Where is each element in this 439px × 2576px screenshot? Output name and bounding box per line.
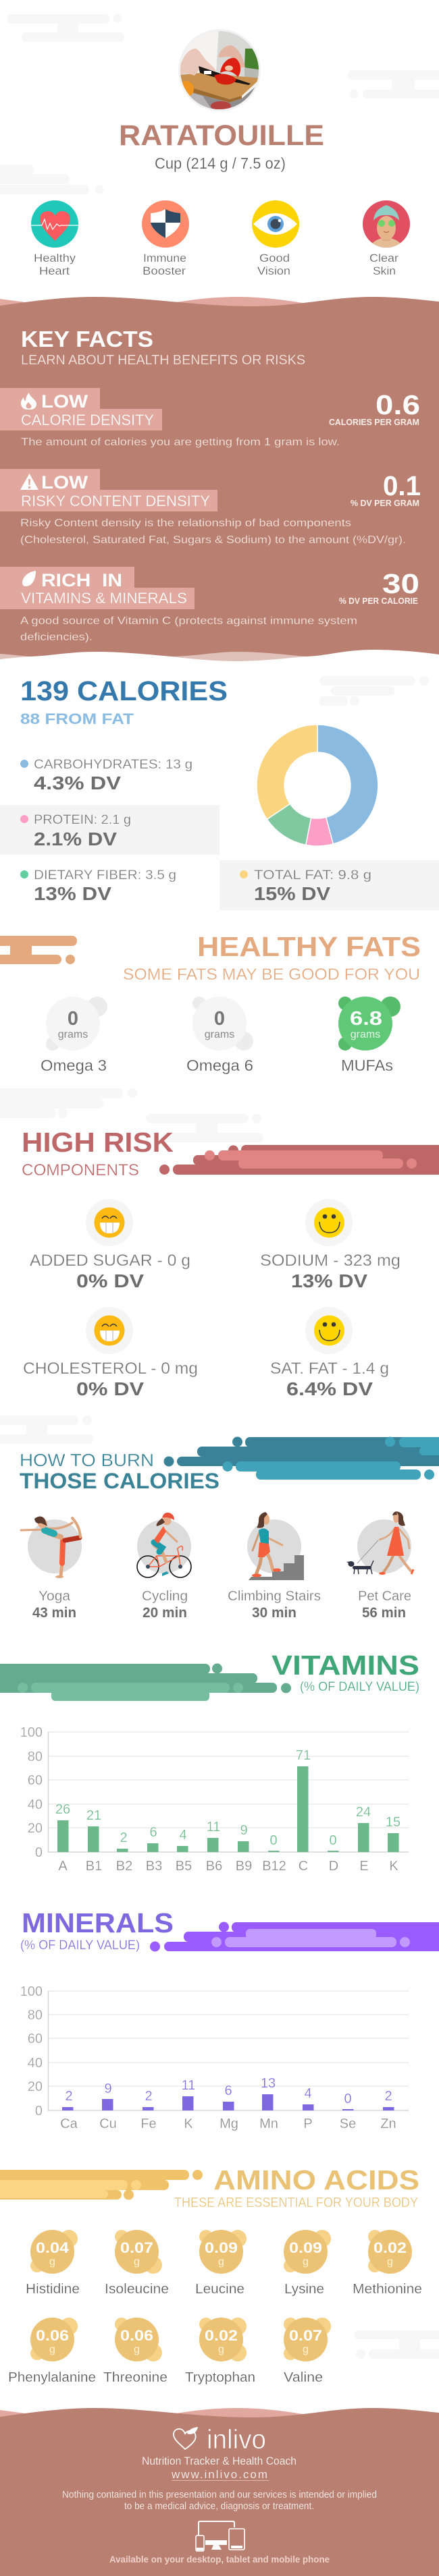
heading: amino acids: AMINO ACIDS <box>213 2164 419 2195</box>
value: 0.1: 0.1 <box>383 470 421 501</box>
bar chart: minerals: 0 <box>35 2104 43 2119</box>
isoleucine: 0.07 <box>120 2239 153 2256</box>
omega 6 <box>186 997 253 1074</box>
heading: those calories: THOSE CALORIES <box>20 1469 220 1493</box>
bar chart: minerals: 4 <box>304 2086 312 2101</box>
added sugar <box>30 1199 190 1291</box>
added sugar: ADDED SUGAR - 0 g <box>30 1252 190 1270</box>
bar chart: vitamins: 26 <box>55 1802 70 1817</box>
label: immune booster <box>143 252 186 277</box>
bar chart: vitamins: 0 <box>269 1833 278 1848</box>
serving size: Cup (214 g / 7.5 oz) <box>155 155 286 172</box>
bar chart: minerals: K <box>184 2117 193 2131</box>
panel: calories <box>0 675 439 910</box>
saturated fat: SAT. FAT - 1.4 g <box>270 1360 389 1378</box>
bar chart: vitamins: 80 <box>28 1749 43 1764</box>
omega 3 <box>41 997 107 1074</box>
legend: protein: PROTEIN: 2.1 g <box>34 813 131 827</box>
methionine <box>353 2230 422 2297</box>
histidine: 0.04 <box>36 2239 70 2256</box>
logo: inlivo: inlivo <box>207 2425 266 2455</box>
bar chart: minerals: 100 <box>20 1984 43 1999</box>
activity: cycling <box>137 1513 191 1577</box>
subheading: components: COMPONENTS <box>22 1161 139 1179</box>
label: good vision: Good <box>259 252 290 264</box>
label: clear skin: Skin <box>373 264 396 277</box>
label: pet care <box>358 1589 411 1621</box>
label: yoga: Yoga <box>38 1589 71 1604</box>
donut chart <box>257 725 378 846</box>
omega 3: grams <box>58 1029 88 1040</box>
label: clear skin: Clear <box>369 252 398 264</box>
panel: how to burn those calories <box>0 1416 439 1621</box>
bar chart: minerals: 2 <box>384 2089 392 2104</box>
label: good vision <box>257 252 290 277</box>
bar chart: vitamins: B6 <box>206 1859 222 1874</box>
legend: protein: 2.1% DV <box>34 829 118 849</box>
cholesterol: CHOLESTEROL - 0 mg <box>23 1360 198 1378</box>
omega 6: 0 <box>214 1008 225 1030</box>
legend: protein <box>0 805 220 855</box>
icon: leaf <box>22 571 36 586</box>
legend: total fat: TOTAL FAT: 9.8 g <box>254 868 371 883</box>
bar chart: vitamins: A <box>58 1859 68 1874</box>
icon: good vision <box>252 200 299 248</box>
bar chart: vitamins: 100 <box>20 1725 43 1740</box>
legend: dietary fiber: 13% DV <box>34 883 112 904</box>
title: RATATOUILLE <box>119 119 324 152</box>
label: pet care: Pet Care <box>358 1589 411 1604</box>
cholesterol <box>23 1307 198 1399</box>
bar chart: minerals: Fe <box>140 2117 157 2131</box>
bar chart: vitamins: 24 <box>356 1805 371 1820</box>
legend: total fat: 15% DV <box>254 883 331 904</box>
bar chart: vitamins: 60 <box>28 1773 43 1788</box>
label: healthy heart: Healthy <box>34 252 76 264</box>
heading: key facts: KEY FACTS <box>21 327 153 352</box>
label: yoga: 43 min <box>32 1605 76 1621</box>
icon: warning <box>20 474 38 490</box>
activity: yoga <box>21 1517 82 1578</box>
bar chart: vitamins: E <box>359 1859 369 1874</box>
bar chart: minerals: Mg <box>220 2117 238 2131</box>
disclaimer: Nothing contained in this presentation and our services is intended or implied <box>62 2490 377 2500</box>
label: low: LOW <box>41 391 88 412</box>
disclaimer <box>62 2490 377 2512</box>
panel: high risk components <box>0 1088 439 1399</box>
legend: carbohydrates: CARBOHYDRATES: 13 g <box>34 758 192 772</box>
mufas: grams <box>351 1029 380 1040</box>
threonine: g <box>134 2344 140 2355</box>
logo: inlivo <box>174 2425 266 2455</box>
panel: key facts <box>0 297 439 661</box>
bar chart: minerals: Zn <box>380 2117 396 2131</box>
phenylalanine: 0.06 <box>36 2327 69 2344</box>
isoleucine: Isoleucine <box>105 2282 169 2297</box>
omega 6: Omega 6 <box>186 1057 253 1074</box>
bar chart: minerals: Se <box>340 2117 356 2131</box>
icon: healthy heart <box>31 200 78 248</box>
mufas <box>338 997 401 1074</box>
disclaimer: to be a medical advice, diagnosis or treatment. <box>124 2501 314 2512</box>
tryptophan: g <box>218 2344 224 2355</box>
methionine: 0.02 <box>373 2239 407 2256</box>
label: vitamins and minerals: VITAMINS & MINERALS <box>21 590 187 607</box>
legend: carbohydrates: 4.3% DV <box>34 773 122 793</box>
tryptophan: Tryptophan <box>185 2370 255 2385</box>
banner: teal cloud <box>163 1437 439 1480</box>
label: low: LOW <box>41 472 88 493</box>
bar chart: vitamins: B5 <box>176 1859 192 1874</box>
valine: g <box>303 2344 309 2355</box>
cholesterol: 0% DV <box>76 1378 145 1399</box>
bar chart: minerals: 6 <box>224 2083 232 2098</box>
sodium <box>260 1199 401 1291</box>
label: rich in: RICH IN <box>41 570 122 590</box>
benefit icons row <box>31 200 410 277</box>
subheading: THESE ARE ESSENTIAL FOR YOUR BODY <box>174 2195 418 2210</box>
label: pet care: 56 min <box>362 1605 406 1621</box>
isoleucine: g <box>134 2256 140 2268</box>
subheading: daily value: (% OF DAILY VALUE) <box>300 1679 419 1694</box>
label: healthy heart: Heart <box>39 264 70 277</box>
icon: smile <box>314 1208 344 1237</box>
bar chart: vitamins: C <box>299 1859 308 1874</box>
bar chart: vitamins: 71 <box>296 1748 311 1763</box>
unit: calories per gram: CALORIES PER GRAM <box>329 418 419 427</box>
omega 3: 0 <box>68 1008 78 1030</box>
website: www.inlivo.com <box>171 2468 267 2481</box>
methionine: g <box>387 2256 393 2268</box>
icon: immune booster <box>142 200 189 248</box>
description: A good source of Vitamin C (protects against immune system <box>20 615 357 627</box>
phenylalanine: Phenylalanine <box>8 2370 96 2385</box>
bar chart: minerals: 9 <box>104 2081 112 2096</box>
panel: healthy fats <box>0 931 421 1074</box>
heading: high risk: HIGH RISK <box>22 1127 174 1158</box>
fact: calorie density <box>0 388 420 448</box>
description: (Cholesterol, Saturated Fat, Sugars & Sodium) to the amount (%DV/gr). <box>20 534 406 546</box>
leucine <box>195 2230 247 2297</box>
banner: red cloud <box>159 1145 439 1175</box>
histidine <box>26 2230 80 2297</box>
heading: vitamins: VITAMINS <box>272 1650 419 1681</box>
lysine <box>284 2230 331 2297</box>
bar chart: vitamins: B1 <box>86 1859 102 1874</box>
bar chart: vitamins: 0 <box>329 1833 337 1848</box>
legend: dietary fiber: DIETARY FIBER: 3.5 g <box>34 868 176 883</box>
valine <box>284 2318 331 2385</box>
histidine: Histidine <box>26 2282 80 2297</box>
bar chart: vitamins: 15 <box>386 1815 401 1830</box>
heading: how to burn: HOW TO BURN <box>20 1450 154 1470</box>
banner: green cloud <box>0 1664 291 1701</box>
sodium: SODIUM - 323 mg <box>260 1252 401 1270</box>
availability note: Available on your desktop, tablet and mobile phone <box>109 2554 330 2565</box>
icon: flame <box>21 393 36 410</box>
bar chart: vitamins: B9 <box>236 1859 252 1874</box>
methionine: Methionine <box>353 2282 422 2297</box>
label: cycling: Cycling <box>142 1589 188 1604</box>
subheading: from fat: 88 FROM FAT <box>20 710 134 727</box>
lysine: g <box>303 2256 309 2268</box>
legend: total fat <box>220 860 439 910</box>
tagline: Nutrition Tracker & Health Coach <box>142 2455 296 2467</box>
phenylalanine: g <box>49 2344 55 2355</box>
icon: grin <box>95 1208 124 1237</box>
bar chart: minerals: 11 <box>182 2078 195 2093</box>
mufas: 6.8 <box>350 1008 382 1030</box>
bar chart: vitamins: K <box>389 1859 398 1874</box>
bar chart: minerals: P <box>303 2117 313 2131</box>
heading: healthy fats: HEALTHY FATS <box>197 931 421 962</box>
bar chart: minerals <box>20 1984 409 2131</box>
omega 3: Omega 3 <box>41 1057 107 1074</box>
label: risky content density: RISKY CONTENT DENSITY <box>21 493 210 509</box>
activity: pet care <box>346 1511 413 1575</box>
fact: rich in vitamins and minerals <box>0 567 419 643</box>
threonine <box>103 2318 167 2385</box>
panel: minerals <box>20 1907 439 2131</box>
bar chart: vitamins: 20 <box>28 1821 43 1836</box>
threonine: Threonine <box>103 2370 167 2385</box>
description: Risky Content density is the relationship of bad components <box>20 517 351 529</box>
label: climbing stairs <box>228 1589 321 1621</box>
leucine: 0.09 <box>205 2239 238 2256</box>
bar chart: minerals: 40 <box>28 2056 43 2071</box>
bar chart: vitamins: 0 <box>35 1845 43 1860</box>
icon: smile <box>314 1316 344 1345</box>
bar chart: vitamins: B2 <box>116 1859 132 1874</box>
mufas: MUFAs <box>341 1057 393 1074</box>
threonine: 0.06 <box>120 2327 153 2344</box>
lysine: 0.09 <box>289 2239 322 2256</box>
fact: risky content density <box>0 469 421 546</box>
bar chart: minerals: 20 <box>28 2079 43 2094</box>
saturated fat <box>270 1307 389 1399</box>
icon: devices <box>196 2521 244 2551</box>
label: yoga <box>32 1589 76 1621</box>
legend: dietary fiber <box>20 868 176 904</box>
added sugar: 0% DV <box>76 1270 145 1291</box>
bar chart: vitamins: 11 <box>207 1820 220 1835</box>
description: The amount of calories you are getting from 1 gram is low. <box>21 437 340 448</box>
value: 30: 30 <box>382 568 419 599</box>
bar chart: vitamins: 4 <box>179 1828 187 1843</box>
leucine: g <box>218 2256 224 2268</box>
tryptophan <box>185 2318 255 2385</box>
bar chart: vitamins: 40 <box>28 1797 43 1812</box>
panel: amino acids <box>0 2164 439 2385</box>
subheading: SOME FATS MAY BE GOOD FOR YOU <box>123 965 420 984</box>
description: deficiencies). <box>20 632 93 643</box>
bar chart: vitamins: 6 <box>149 1825 157 1840</box>
label: immune booster: Booster <box>143 264 186 277</box>
heading: 139 calories: 139 CALORIES <box>20 675 228 706</box>
banner: yellow cloud <box>0 2170 203 2200</box>
panel: footer <box>0 2408 439 2576</box>
bar chart: vitamins: 21 <box>86 1808 101 1823</box>
description <box>20 615 357 643</box>
panel: vitamins <box>0 1650 419 1874</box>
bar chart: vitamins: D <box>329 1859 338 1874</box>
bar chart: minerals: 80 <box>28 2008 43 2023</box>
lysine: Lysine <box>284 2282 324 2297</box>
sodium: 13% DV <box>291 1270 368 1291</box>
label: cycling: 20 min <box>143 1605 187 1621</box>
bar chart: minerals: 2 <box>145 2089 153 2104</box>
banner: orange cloud <box>0 936 77 964</box>
bar chart: minerals: Cu <box>99 2117 117 2131</box>
photo: chopping red pepper <box>178 29 261 111</box>
bar chart: minerals: Mn <box>259 2117 278 2131</box>
omega 6: grams <box>205 1029 234 1040</box>
label: healthy heart <box>34 252 76 277</box>
isoleucine <box>105 2230 169 2297</box>
bar chart: vitamins: B3 <box>146 1859 162 1874</box>
label: clear skin <box>369 252 398 277</box>
heading: minerals: MINERALS <box>22 1907 174 1938</box>
label: immune booster: Immune <box>143 252 186 264</box>
unit: dv per gram: % DV PER GRAM <box>351 499 419 508</box>
bar chart: vitamins: 2 <box>120 1830 128 1845</box>
tryptophan: 0.02 <box>205 2327 238 2344</box>
bar chart: minerals: Ca <box>60 2117 78 2131</box>
histidine: g <box>49 2256 55 2268</box>
icon: clear skin <box>363 200 410 248</box>
subheading: daily value: (% OF DAILY VALUE) <box>20 1938 140 1953</box>
bar chart: minerals: 2 <box>65 2089 73 2104</box>
activity: climbing stairs <box>247 1512 304 1580</box>
label: good vision: Vision <box>257 264 290 277</box>
subheading: key facts: LEARN ABOUT HEALTH BENEFITS OR RISKS <box>21 353 305 368</box>
label: climbing stairs: Climbing Stairs <box>228 1589 321 1604</box>
banner: purple cloud <box>150 1922 439 1951</box>
valine: 0.07 <box>289 2327 322 2344</box>
bar chart: minerals: 13 <box>261 2076 276 2091</box>
label: calorie density: CALORIE DENSITY <box>21 412 154 428</box>
phenylalanine <box>8 2318 96 2385</box>
label: climbing stairs: 30 min <box>252 1605 296 1621</box>
bar chart: vitamins <box>20 1725 409 1874</box>
saturated fat: 6.4% DV <box>286 1378 373 1399</box>
unit: dv per calorie: % DV PER CALORIE <box>339 596 418 606</box>
bar chart: minerals: 60 <box>28 2032 43 2046</box>
bar chart: vitamins: 9 <box>240 1823 248 1838</box>
icon: grin <box>95 1316 124 1345</box>
decorative clouds, header <box>0 13 439 194</box>
leucine: Leucine <box>195 2282 244 2297</box>
bar chart: minerals: 0 <box>344 2092 352 2106</box>
bar chart: vitamins: B12 <box>262 1859 286 1874</box>
description <box>20 517 406 546</box>
legend: carbohydrates <box>20 758 192 793</box>
label: cycling <box>142 1589 188 1621</box>
valine: Valine <box>284 2370 323 2385</box>
value: 0.6: 0.6 <box>376 389 420 420</box>
